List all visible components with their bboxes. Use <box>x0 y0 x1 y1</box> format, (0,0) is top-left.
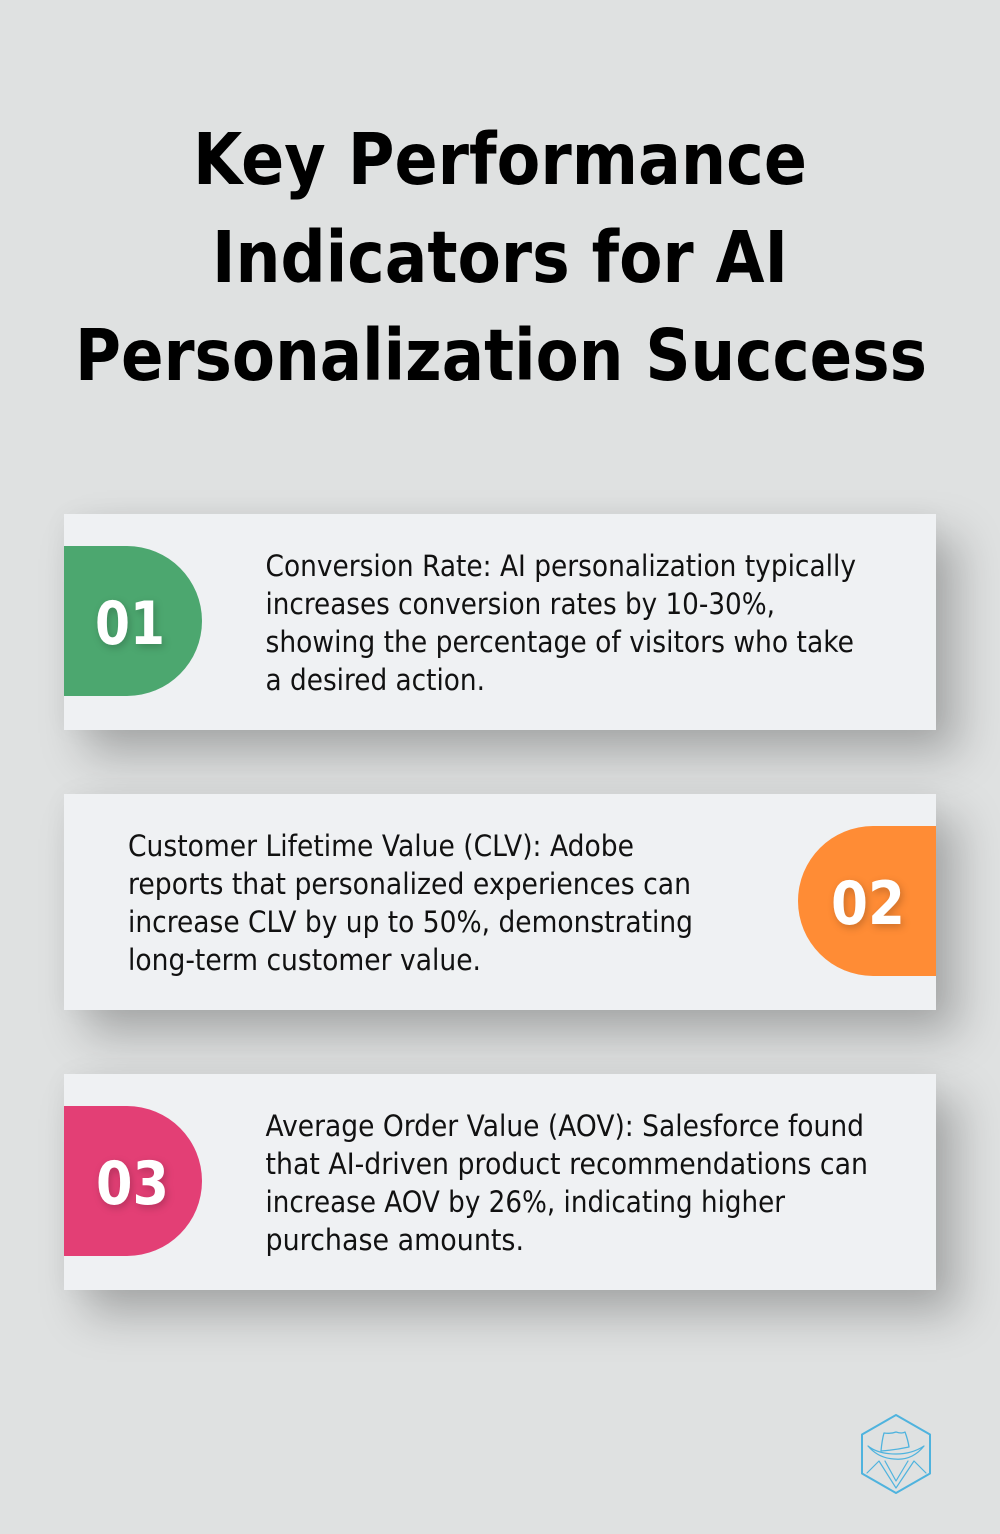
text: conversion rate: increases conversion rates by 10-30%, <box>266 587 775 621</box>
text: conversion rate: Conversion Rate: AI personalization typically <box>266 549 856 583</box>
text: conversion rate <box>266 549 856 697</box>
number 02: 02 <box>831 869 905 939</box>
title: Key Performance <box>193 118 807 201</box>
panel: customer lifetime value card <box>64 794 936 1010</box>
title: Indicators for AI <box>212 216 788 299</box>
text: customer lifetime value: long-term customer value. <box>128 943 481 977</box>
title <box>75 118 927 397</box>
number 01: 01 <box>95 589 165 659</box>
text: customer lifetime value <box>128 829 693 977</box>
text: conversion rate: showing the percentage of visitors who take <box>266 625 854 659</box>
panel: conversion rate card <box>64 514 936 730</box>
badge: green 01 background <box>64 546 202 696</box>
text: average order value: purchase amounts. <box>266 1223 524 1257</box>
text: average order value: increase AOV by 26%, indicating higher <box>266 1185 785 1219</box>
text: conversion rate: a desired action. <box>266 663 485 697</box>
badge: pink 03 background <box>64 1106 202 1256</box>
badge: orange 02 background <box>798 826 936 976</box>
icon: hexagon spy logo <box>862 1415 930 1493</box>
text: average order value <box>266 1109 868 1257</box>
number 03: 03 <box>96 1149 169 1219</box>
panel: average order value card <box>64 1074 936 1290</box>
text: average order value: that AI-driven product recommendations can <box>266 1147 868 1181</box>
text: customer lifetime value: Customer Lifetime Value (CLV): Adobe <box>128 829 634 863</box>
text: customer lifetime value: reports that personalized experiences can <box>128 867 691 901</box>
text: average order value: Average Order Value (AOV): Salesforce found <box>266 1109 864 1143</box>
text: customer lifetime value: increase CLV by up to 50%, demonstrating <box>128 905 693 939</box>
